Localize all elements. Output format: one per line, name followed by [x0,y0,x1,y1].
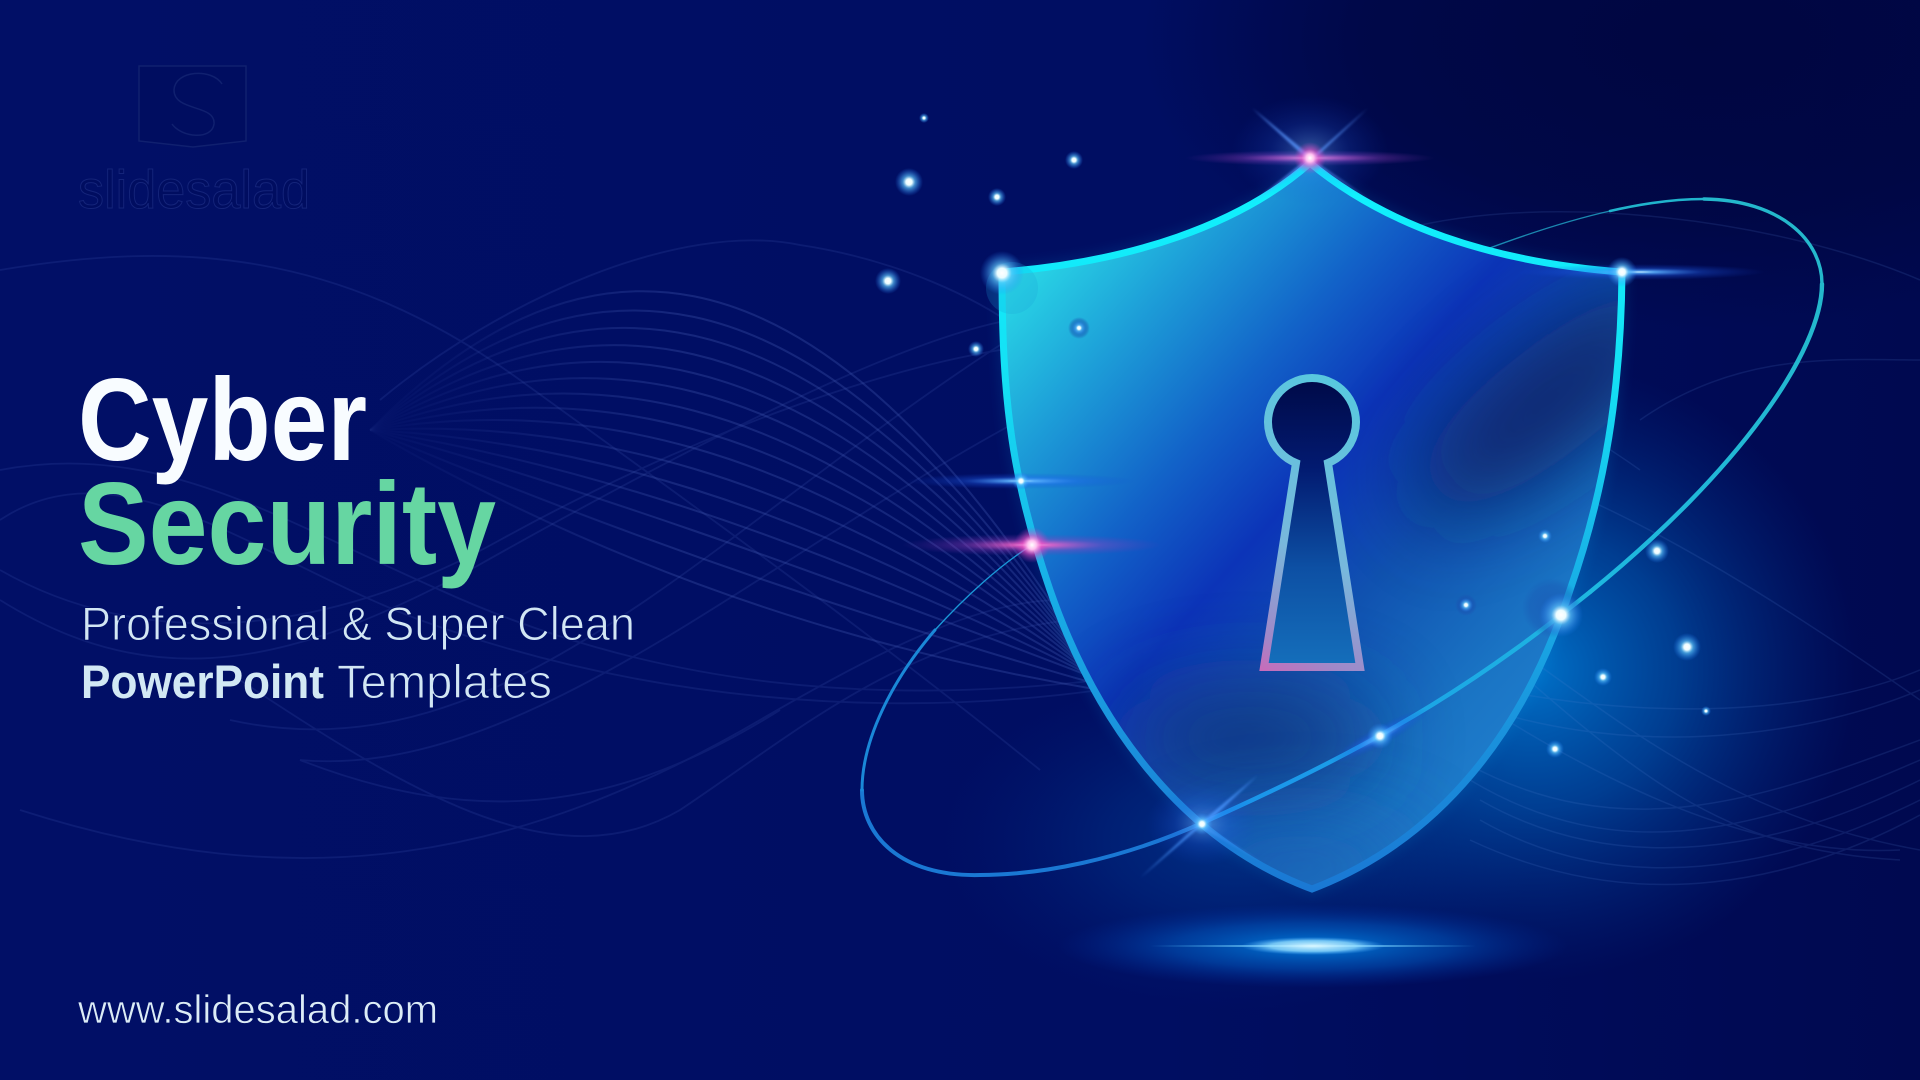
floor glow under shield [1058,904,1568,988]
keyhole [1264,378,1360,667]
website url: www.slidesalad.com [77,988,438,1032]
spark: left blue streak [906,472,1136,490]
spark: orbit middle [1326,701,1434,771]
shield outline [1002,163,1622,889]
subtitle [81,597,635,708]
watermark wordmark: slidesalad [78,160,310,220]
shield [996,162,1628,893]
crossing wave lines [0,240,1100,858]
glowing particles [875,113,1711,758]
spark: shield lower-left star [1140,775,1265,878]
right wave lines [1100,212,1920,884]
shield glow [1002,163,1622,889]
spark: shield right corner [1515,257,1765,287]
subtitle line 2 end: Templates [337,655,552,708]
spark: left pink streak [902,527,1162,563]
shield body [1006,168,1618,886]
title line: Cyber: Cyber [78,354,367,485]
title line: Security: Security [78,458,496,589]
orbit ring front segment [862,545,1590,875]
orbit ring back segment [1487,199,1822,592]
subtitle line 1: Professional & Super Clean [81,597,635,650]
title [78,354,496,589]
watermark shield icon [139,66,246,147]
background wave lines [370,291,1100,690]
watermark logo [78,66,310,220]
subtitle line 2: PowerPoint [81,655,324,708]
spark: shield top pink star [1185,95,1435,205]
